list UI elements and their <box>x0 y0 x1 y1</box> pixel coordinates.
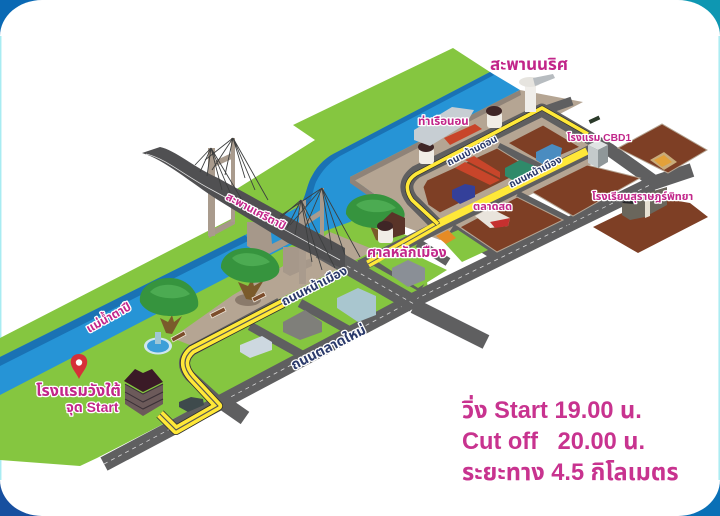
start time: วิ่ง Start 19.00 น. <box>462 394 642 424</box>
route first leg <box>160 303 283 430</box>
fresh market building <box>475 208 510 228</box>
label: Narit bridge: สะพานนริศ <box>490 55 568 74</box>
route: yellow running line <box>160 108 588 430</box>
corner: top right <box>670 0 720 44</box>
map ground <box>0 48 708 466</box>
label: start point: จุด Start <box>66 399 119 416</box>
school building <box>622 187 667 220</box>
benches <box>171 292 266 342</box>
lower green land <box>0 215 428 466</box>
red market stalls <box>444 124 500 185</box>
label: Tha Ruea Non pier: ท่าเรือนอน <box>418 114 469 128</box>
bridge approach road <box>320 250 414 304</box>
label: city pillar shrine: ศาลหลักเมือง <box>367 244 447 260</box>
blue roof hall <box>452 184 475 204</box>
road label: Ban Don: ถนนบ้านดอน <box>444 132 499 169</box>
buildings <box>124 74 677 416</box>
stub road south of start <box>222 402 245 418</box>
white round pavilion left <box>377 221 393 243</box>
brown plots <box>423 124 707 252</box>
tan waterfront <box>350 90 620 240</box>
tree 3 <box>346 194 405 242</box>
shrine hut <box>378 212 405 240</box>
bridge piers <box>208 218 312 276</box>
green pocket near shrine <box>378 250 447 288</box>
label: CBD1 hotel: โรงแรม CBD1 <box>567 132 631 144</box>
blue hall <box>536 144 562 166</box>
label: Wang Tai hotel: โรงแรมวังใต้ <box>36 382 121 400</box>
CBD1 hotel tower <box>588 140 608 168</box>
trees and park <box>140 194 405 354</box>
traffic sign <box>589 116 600 124</box>
corner: bottom left <box>0 472 50 516</box>
bridge cables <box>195 138 360 270</box>
river wall <box>350 90 521 206</box>
corner: top left <box>0 0 50 44</box>
road label: Talat Mai: ถนนตลาดใหม่ <box>288 321 368 373</box>
bridge deck <box>142 147 345 270</box>
corner: bottom right <box>670 472 720 516</box>
lower-left road with route <box>184 303 280 405</box>
main road: ถนนตลาดใหม่ <box>104 184 652 464</box>
tree 2 <box>221 248 279 306</box>
route ring leg <box>407 108 588 224</box>
stub road south-east of bridge <box>414 306 486 342</box>
label: Tapi river: แม่น้ำตาปี <box>83 298 133 336</box>
info text block <box>462 394 679 486</box>
bridge towers <box>208 138 324 284</box>
road label: Na Mueang right: ถนนหน้าเมือง <box>506 153 564 191</box>
route second leg <box>368 151 587 264</box>
central road <box>360 150 592 266</box>
green roof hall <box>505 160 535 184</box>
upper green bank <box>0 48 520 400</box>
distance: ระยะทาง 4.5 กิโลเมตร <box>462 460 679 486</box>
road network <box>104 101 707 464</box>
small car park hut <box>179 397 204 412</box>
label: fresh market: ตลาดสด <box>473 201 512 213</box>
small connecting roads <box>452 101 572 256</box>
white round pavilion 2 <box>418 142 434 164</box>
far right lower plot <box>593 197 708 253</box>
tan riverside park <box>172 232 375 345</box>
location pin <box>71 354 87 379</box>
side roads left <box>250 303 350 356</box>
block buildings <box>240 336 272 358</box>
start hotel <box>124 369 163 416</box>
label: Surat Pittaya school: โรงเรียนสุราษฎร์พิทยา <box>592 191 693 203</box>
Narit bridge tower <box>519 74 555 112</box>
orange stalls <box>436 230 456 244</box>
tree 1 <box>140 278 198 334</box>
cut off time: Cut off 20.00 น. <box>462 429 645 455</box>
east stub road <box>650 170 692 184</box>
river <box>0 72 520 395</box>
fountain <box>144 332 172 354</box>
temple gold <box>650 152 677 170</box>
pier terminal <box>414 107 474 146</box>
label: bridge: สะพานเศรีตาปี <box>224 191 288 233</box>
white round pavilion 3 <box>486 106 502 128</box>
road label: Na Mueang left: ถนนหน้าเมือง <box>279 263 350 309</box>
ring road <box>407 110 652 226</box>
green pocket near market <box>440 230 488 262</box>
bridge <box>142 138 360 284</box>
